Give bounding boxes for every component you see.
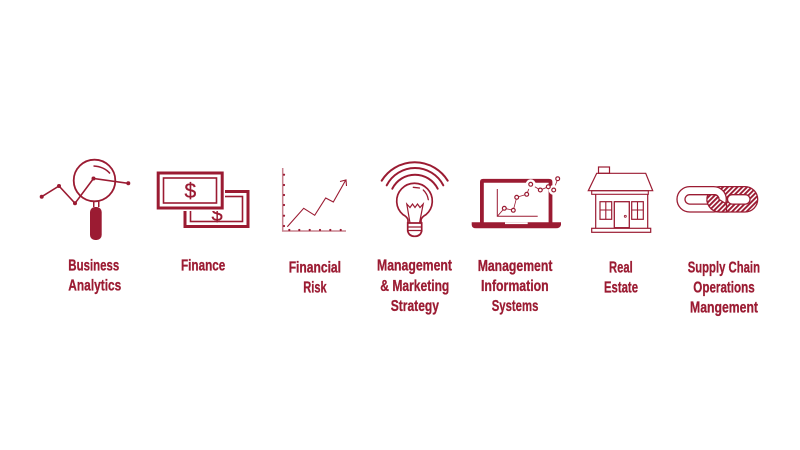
label: Management & Marketing Strategy: Strategy [391, 298, 439, 315]
label: Management Information Systems [478, 258, 553, 315]
icon: rising line chart [283, 168, 346, 231]
column: Finance [156, 170, 248, 275]
label: Supply Chain Operations Mangement [688, 260, 760, 317]
label: Real Estate: Real [609, 260, 633, 277]
label: Supply Chain Operations Mangement: Mangement [690, 300, 759, 317]
icon: dollar bills [156, 170, 248, 226]
label: Management & Marketing Strategy: Management [377, 258, 453, 275]
icon: dollar bills: $ [184, 180, 196, 203]
label: Supply Chain Operations Mangement: Supply Chain [688, 260, 760, 277]
icon: house [588, 167, 653, 232]
label: Real Estate [604, 260, 638, 297]
column: Financial Risk [283, 168, 346, 297]
label: Financial Risk: Financial [289, 260, 341, 277]
label: Management & Marketing Strategy: & Marketing [380, 278, 449, 295]
label: Business Analytics: Business [68, 258, 119, 275]
label: Management Information Systems: Systems [492, 298, 538, 315]
label: Business Analytics: Analytics [68, 278, 121, 295]
label: Management Information Systems: Information [481, 278, 549, 295]
icon: laptop with scatter chart [472, 177, 561, 228]
column: Business Analytics [40, 160, 130, 295]
label: Business Analytics [68, 258, 121, 295]
column: Real Estate [588, 167, 653, 297]
icon: dollar bills: $ [211, 204, 223, 226]
label: Supply Chain Operations Mangement: Operations [693, 280, 755, 297]
icon: chain links [677, 187, 758, 212]
label: Management & Marketing Strategy [377, 258, 453, 315]
label: Financial Risk: Risk [303, 280, 327, 297]
icon: light bulb with signal arcs [382, 162, 448, 236]
label: Management Information Systems: Management [478, 258, 553, 275]
column: Management & Marketing Strategy [377, 162, 453, 315]
label: Finance: Finance [181, 258, 225, 275]
column: Supply Chain Operations Mangement [677, 187, 760, 317]
icon: magnifying glass over line chart [40, 160, 130, 240]
column: Management Information Systems [472, 177, 561, 315]
label: Financial Risk [289, 260, 341, 297]
label: Real Estate: Estate [604, 280, 638, 297]
